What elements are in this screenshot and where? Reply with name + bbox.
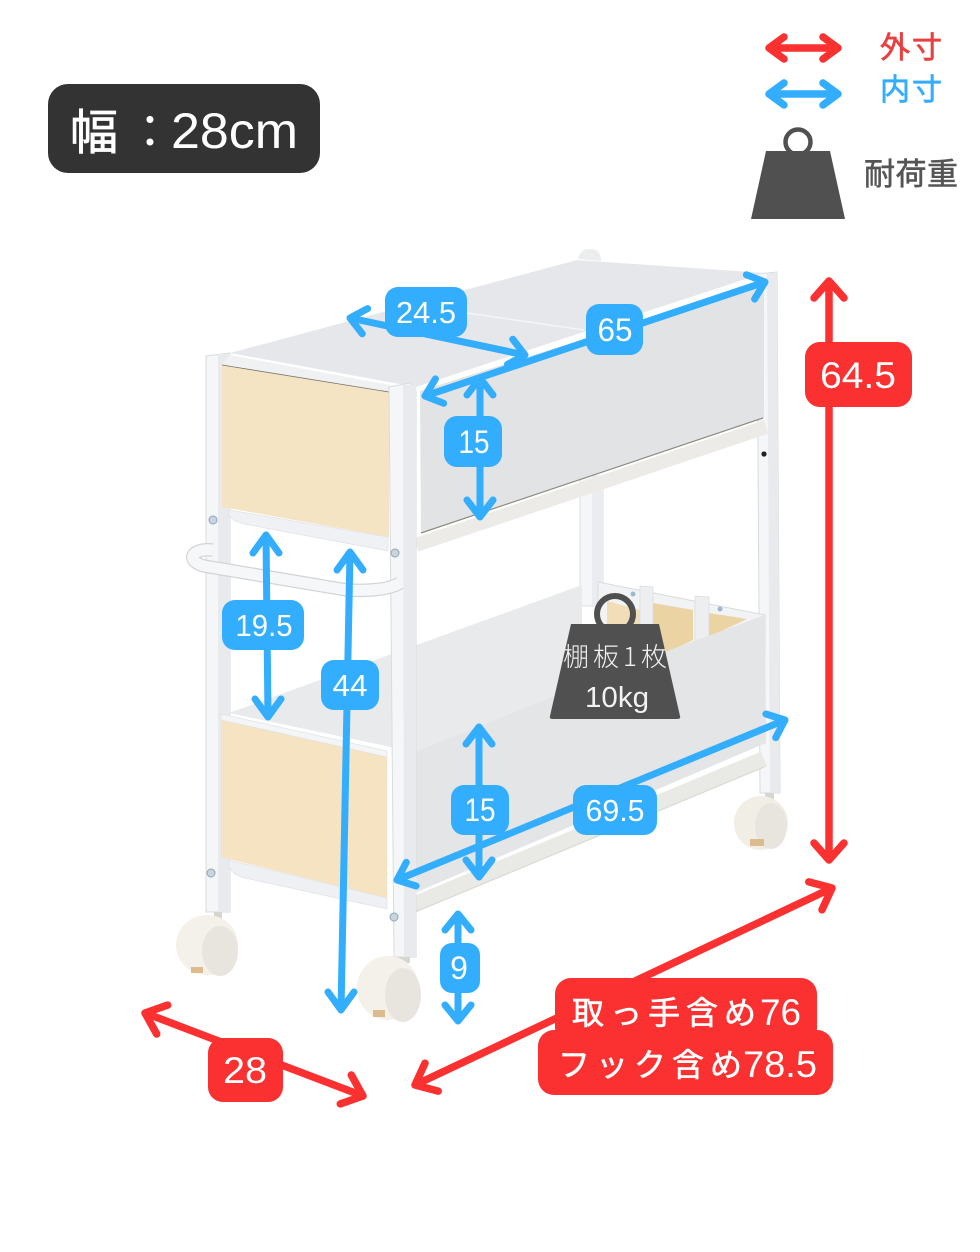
handle <box>193 550 400 590</box>
width badge: 幅 <box>70 93 118 163</box>
lower tube rail <box>413 759 764 912</box>
legend: inner dimension <box>769 65 942 109</box>
label: 19.5: 19.5 <box>236 608 292 643</box>
top box lid <box>222 249 764 392</box>
legend: load capacity icon: 耐荷重 <box>864 149 958 194</box>
label: 28: 28 <box>223 1050 267 1091</box>
label: 44 <box>321 660 379 710</box>
label: total length with handle and hook: 取っ手含め <box>572 988 756 1034</box>
arrow: lower height 44 <box>328 552 363 1010</box>
label: total length with handle and hook: 76 <box>760 992 801 1033</box>
lower basket interior <box>229 585 582 752</box>
arrow: total height 64.5 <box>814 281 844 860</box>
caster: back right <box>734 796 788 850</box>
label: 69.5 <box>573 785 657 835</box>
label: top 15: 15 <box>458 424 490 460</box>
screws <box>207 516 399 921</box>
top bracket <box>229 510 388 551</box>
load capacity weight on shelf: 棚板1枚 <box>563 637 667 674</box>
label: total length with handle and hook: フック含め <box>558 1040 742 1086</box>
label: 65: 65 <box>598 312 632 348</box>
legend: inner dimension: 内寸 <box>880 65 942 109</box>
label: 64.5: 64.5 <box>820 355 896 396</box>
width badge: ： <box>127 96 173 162</box>
lower wood panel <box>221 714 387 898</box>
top wood panel <box>222 365 389 537</box>
label: 9: 9 <box>450 950 468 986</box>
label: 9 <box>440 943 480 993</box>
lower bracket <box>229 860 387 909</box>
back right post <box>757 272 780 800</box>
label: top 15 <box>444 416 502 467</box>
label: 44: 44 <box>332 668 368 703</box>
top tube rail <box>416 418 766 545</box>
left front post <box>206 353 230 919</box>
width badge: 28cm <box>171 103 298 159</box>
label: lower 15: 15 <box>464 792 496 828</box>
right front post <box>389 383 416 963</box>
arrow: width 28 <box>145 1005 363 1104</box>
lower basket rear panel, wood and brackets <box>598 582 765 690</box>
caster: front right <box>357 956 421 1022</box>
label: 64.5 <box>805 342 912 407</box>
arrow: top height 15 <box>467 378 493 517</box>
load capacity weight on shelf <box>550 596 680 719</box>
label: lower 15 <box>451 785 509 835</box>
label: 19.5 <box>222 600 304 650</box>
caster: front left <box>176 915 238 976</box>
center back post <box>580 476 603 606</box>
arrow: top length 65 <box>425 275 765 403</box>
width badge <box>48 84 320 173</box>
load capacity weight on shelf: 10kg <box>585 682 649 714</box>
storage wagon illustration <box>176 249 788 1022</box>
label: 65 <box>586 304 643 355</box>
label: 69.5: 69.5 <box>586 793 644 828</box>
lower side panel <box>415 615 766 892</box>
arrow: total length <box>415 882 832 1091</box>
label: total length with handle and hook <box>538 978 833 1095</box>
arrow: clearance 19.5 <box>253 535 281 717</box>
arrow: floor clearance 9 <box>445 914 471 1021</box>
legend: outer dimension: 外寸 <box>880 23 942 67</box>
label: 24.5 <box>385 287 467 337</box>
label: 24.5: 24.5 <box>396 295 456 330</box>
legend: outer dimension <box>769 23 942 67</box>
label: 28 <box>208 1038 283 1102</box>
label: total length with handle and hook: 78.5 <box>743 1044 817 1085</box>
legend: load capacity icon <box>751 130 958 219</box>
top side panel <box>420 282 764 533</box>
arrow: lower height 15 <box>466 727 492 877</box>
arrow: lower length 69.5 <box>397 714 785 886</box>
arrow: top depth 24.5 <box>350 309 525 364</box>
